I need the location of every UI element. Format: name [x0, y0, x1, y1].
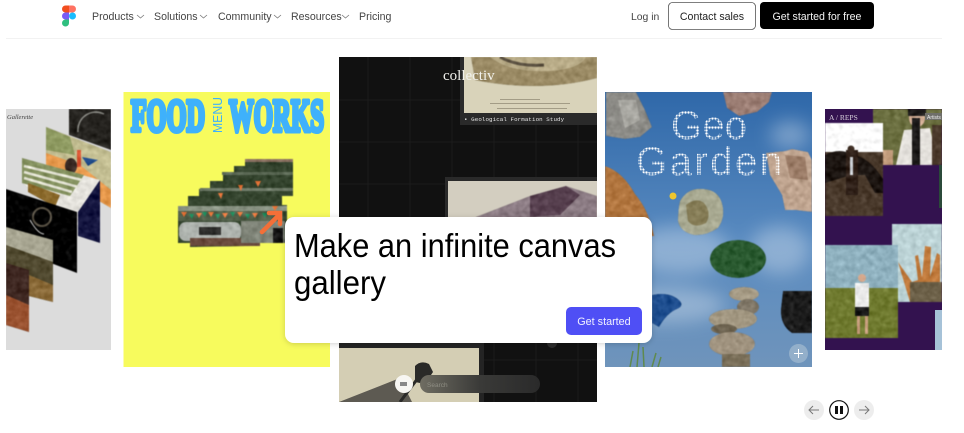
caption: geological formation study: ▪ Geological Formation Study [464, 116, 565, 123]
specimen photo top [460, 57, 597, 125]
menu vertical label: MENU [210, 97, 225, 133]
headline: Make an infinite canvas [294, 227, 616, 264]
search pill [420, 375, 540, 393]
icon: figma logo [62, 6, 76, 26]
headline [294, 227, 616, 301]
callout card [285, 217, 652, 343]
geo garden dotted title [638, 111, 780, 176]
geo garden dotted title: Geo [671, 104, 747, 148]
panel: food works poster [124, 90, 330, 367]
yellow dot [670, 192, 676, 200]
gallerette wordmark: Gallerette [7, 114, 33, 121]
photo: woman portrait [873, 109, 942, 165]
nav menu links: Solutions [154, 11, 198, 23]
search pill: Search [427, 382, 448, 389]
get started button [566, 307, 642, 335]
nav menu links: Community [218, 11, 272, 23]
nav menu links [92, 11, 391, 23]
photo: sky corner [935, 310, 942, 350]
get started button: Get started [577, 316, 631, 328]
grass [630, 343, 661, 367]
small dark dot [547, 343, 557, 348]
geo garden dotted title: Garden [636, 140, 782, 184]
icon: previous arrow [804, 400, 824, 420]
dark green strip [939, 165, 942, 208]
specimen photo middle [445, 177, 597, 217]
nav menu links: Pricing [359, 11, 391, 23]
icon: next arrow [854, 400, 874, 420]
food works title: WORKS [229, 90, 324, 141]
photo: man with horse [825, 123, 883, 216]
icon: plus button [789, 344, 808, 363]
rocks and specimens [605, 92, 812, 367]
panel: collectiv poster [339, 57, 597, 402]
icon: menu circle [395, 375, 413, 393]
get started for free button [760, 2, 874, 29]
headline: gallery [294, 264, 386, 301]
panel: gallerette poster [6, 109, 111, 350]
food works title: FOOD [131, 90, 205, 141]
a/reps wordmark: A / REPS [829, 113, 858, 122]
panel: geo garden poster [605, 92, 812, 367]
icon: pause [830, 401, 848, 419]
specimen photo bottom [339, 343, 484, 402]
clouds [652, 112, 812, 330]
nav menu links: Resources [291, 11, 342, 23]
nav menu links: Products [92, 11, 134, 23]
grid lines [339, 57, 597, 402]
food works title [131, 90, 324, 141]
collectiv wordmark: collectiv [443, 68, 495, 84]
log in link: Log in [631, 12, 660, 23]
get started for free button: Get started for free [773, 11, 862, 23]
carousel controls [804, 400, 874, 420]
contact sales button: Contact sales [680, 11, 744, 23]
food truck collage photo [178, 159, 293, 247]
collage sheets [6, 109, 111, 332]
contact sales button [668, 2, 756, 30]
artists tag: Artists [927, 115, 941, 121]
icon: orange arrow [262, 213, 280, 232]
panel: a/reps poster [825, 109, 942, 350]
navigation bar [62, 2, 874, 30]
artists tag [925, 113, 942, 120]
photo: hand [892, 224, 942, 302]
photo: man in field [825, 245, 898, 338]
